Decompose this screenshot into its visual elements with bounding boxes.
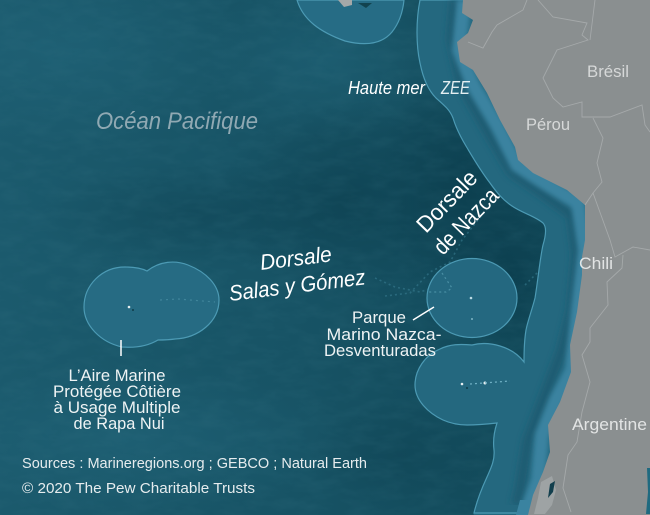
- callout: Parque Marino Nazca-Desventuradas: Parque: [352, 308, 406, 327]
- copyright: © 2020 The Pew Charitable Trusts: [22, 480, 255, 497]
- land masses: [457, 0, 650, 515]
- label: Argentine: Argentine: [572, 415, 647, 434]
- label: Dorsale Salas y Gómez: [228, 241, 367, 306]
- label: Dorsale de Nazca: de Nazca: [428, 182, 504, 259]
- callout: Aire Marine Protégée de Rapa Nui: [53, 340, 181, 433]
- aire protégée : Galápagos: [297, 0, 404, 44]
- ridge seamount traces: [375, 205, 555, 296]
- callout: Aire Marine Protégée de Rapa Nui: de Rapa Nui: [74, 414, 164, 433]
- aire protégée : Parque Marino Nazca-Desventuradas: [427, 258, 517, 338]
- label: Pérou: Pérou: [526, 115, 570, 134]
- label: Océan Pacifique: Océan Pacifique: [96, 108, 258, 135]
- label: Haute mer: Haute mer: [348, 78, 426, 98]
- label: ZEE: ZEE: [440, 78, 471, 98]
- label: Dorsale Salas y Gómez: Dorsale: [259, 241, 333, 275]
- label: Brésil: Brésil: [587, 62, 629, 81]
- callout: Aire Marine Protégée de Rapa Nui: L’Aire Marine: [68, 366, 166, 385]
- country borders: [468, 0, 650, 512]
- label: Dorsale Salas y Gómez: Salas y Gómez: [228, 264, 367, 306]
- callout: Parque Marino Nazca-Desventuradas: Desventuradas: [324, 341, 436, 360]
- coastal shelf and trench: [452, 0, 585, 515]
- zone économique exclusive (ZEE): [415, 0, 600, 515]
- label: Dorsale de Nazca: Dorsale: [411, 165, 482, 237]
- label: Chili: Chili: [579, 254, 613, 273]
- southern Chile fjords and Atlantic edge: [534, 468, 650, 514]
- callout: Aire Marine Protégée de Rapa Nui: Protégée Côtière: [53, 382, 181, 401]
- label: Dorsale de Nazca: [411, 165, 504, 259]
- callout: Aire Marine Protégée de Rapa Nui: à Usage Multiple: [54, 398, 180, 417]
- aire protégée : Rapa Nui: [84, 262, 219, 347]
- sources: Sources : Marineregions.org ; GEBCO ; Natural Earth: [22, 455, 367, 472]
- îles Desventuradas dans la ZEE: [461, 381, 510, 389]
- callout: Parque Marino Nazca-Desventuradas: [324, 307, 442, 360]
- callout: Parque Marino Nazca-Desventuradas: Marino Nazca-: [326, 325, 442, 344]
